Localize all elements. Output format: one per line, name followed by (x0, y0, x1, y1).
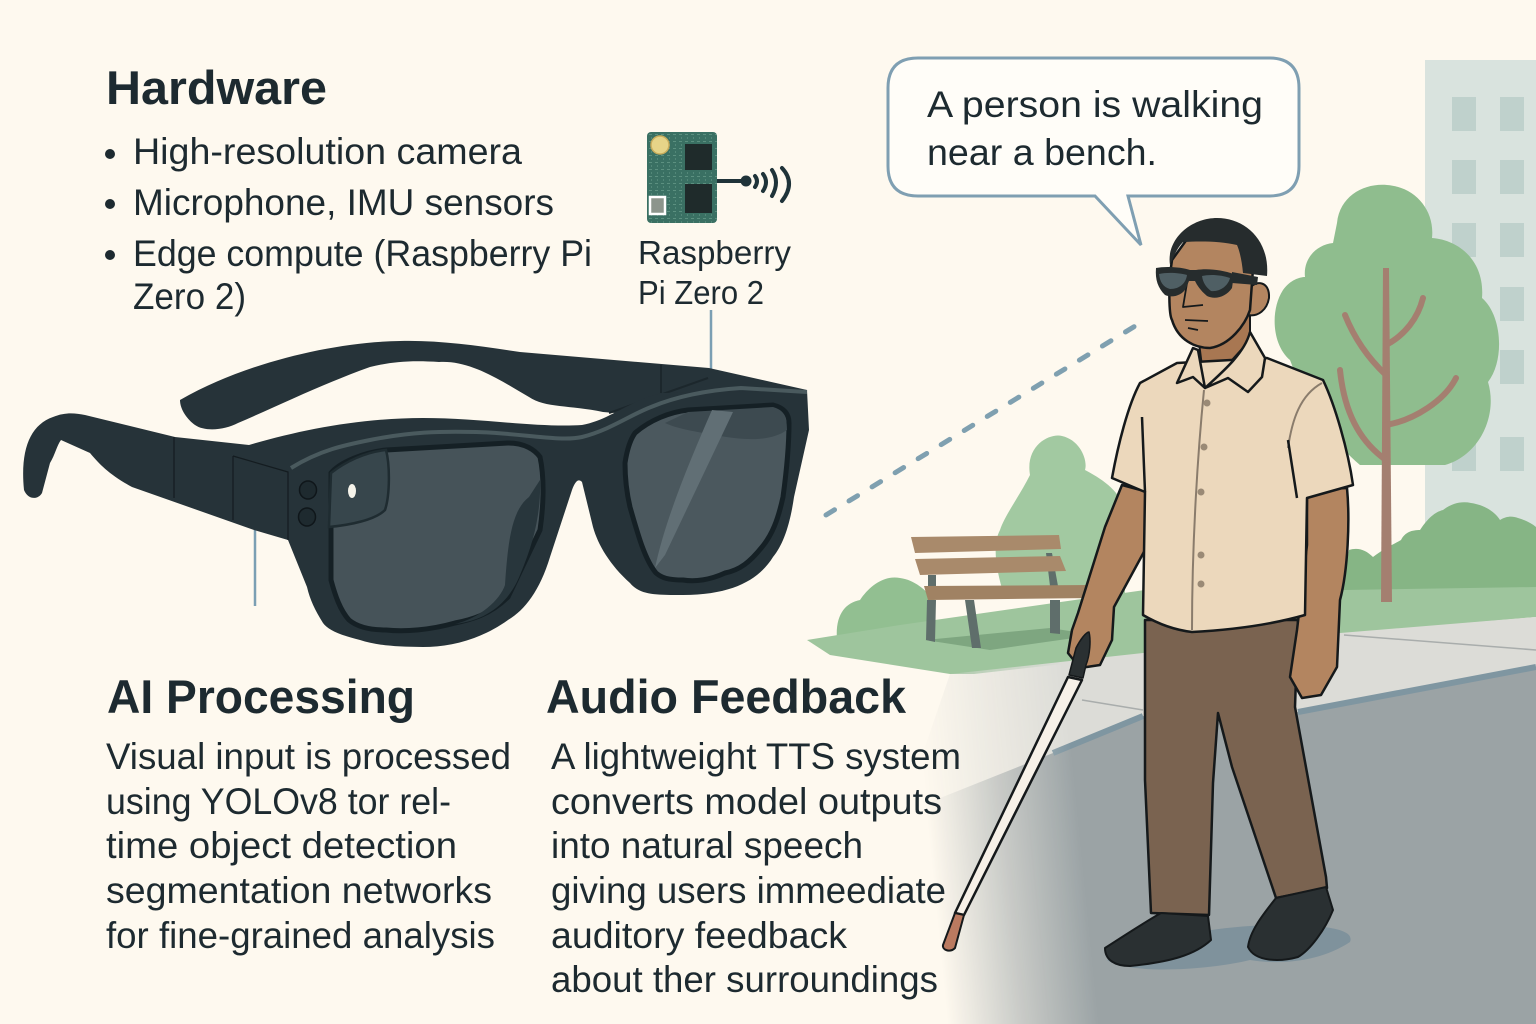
leader line to ai processing (254, 528, 256, 606)
dashed sightline from glasses (826, 320, 1145, 515)
body: audio feedback: converts model outputs (551, 781, 942, 822)
tree trunk and branches (1340, 268, 1456, 602)
heading: audio feedback: Audio Feedback (546, 670, 907, 723)
left arm and hand (1068, 485, 1148, 668)
shirt (1112, 358, 1353, 632)
bullet points: Zero 2) (133, 276, 246, 317)
body: ai processing (106, 736, 511, 956)
body: ai processing: segmentation networks (106, 870, 492, 911)
right lens reflection (655, 410, 733, 568)
hair (1170, 218, 1267, 276)
label: raspberry pi zero 2: Raspberry (638, 234, 791, 271)
smart glasses (23, 341, 809, 647)
camera dot (348, 484, 356, 498)
shoe shadow (1107, 925, 1351, 969)
far temple arm (180, 341, 807, 429)
temple panel seams (174, 437, 288, 540)
pavement and road (880, 617, 1536, 1024)
body: ai processing: for fine-grained analysis (106, 915, 495, 956)
icon: raspberry pi board with wireless signal (647, 132, 789, 223)
bullet points: Microphone, IMU sensors (133, 182, 554, 223)
heading: ai processing: AI Processing (107, 670, 415, 723)
body: audio feedback: A lightweight TTS system (551, 736, 961, 777)
bullet points: High-resolution camera (133, 131, 522, 172)
body: audio feedback: about ther surroundings (551, 959, 938, 1000)
building background (1425, 60, 1536, 540)
collar (1177, 332, 1265, 392)
bullet points: Edge compute (Raspberry Pi (133, 233, 592, 274)
right arm (1290, 488, 1348, 698)
illustration of a person with white cane (943, 218, 1353, 969)
left lens shadow (455, 480, 540, 624)
frame highlight ridge (291, 388, 807, 468)
label: raspberry pi zero 2: Pi Zero 2 (638, 274, 764, 311)
right lens upper shade (665, 407, 787, 439)
tree foliage (1275, 185, 1499, 465)
shirt buttons (1198, 400, 1210, 588)
label: raspberry pi zero 2 (638, 234, 791, 311)
cane (943, 632, 1090, 951)
shoes (1105, 887, 1333, 966)
heading: hardware: Hardware (106, 61, 327, 114)
right lens (625, 405, 789, 581)
neck (1198, 315, 1250, 390)
body: audio feedback: auditory feedback (551, 915, 847, 956)
face (1169, 235, 1254, 348)
left lens (331, 443, 543, 631)
front frame with near temple (23, 390, 809, 647)
body: ai processing: using YOLOv8 tor rel- (106, 781, 451, 822)
ear (1248, 283, 1269, 315)
leader line to hardware (710, 310, 712, 372)
speech bubble: near a bench. (927, 132, 1157, 173)
bullet points (105, 131, 592, 317)
bushes and lawn (807, 436, 1536, 674)
body: ai processing: Visual input is processed (106, 736, 511, 777)
hardware section (105, 61, 592, 317)
trousers (1145, 620, 1327, 915)
sunglasses (1156, 267, 1258, 298)
body: audio feedback: giving users immeediate (551, 870, 946, 911)
camera module (329, 450, 389, 527)
body: audio feedback: into natural speech (551, 825, 863, 866)
body: ai processing: time object detection (106, 825, 457, 866)
sensor holes (298, 481, 316, 526)
temple hinge details (609, 365, 708, 413)
speech bubble (888, 58, 1299, 245)
bench (911, 535, 1095, 650)
body: audio feedback (551, 736, 961, 1000)
audio feedback section (546, 670, 961, 1000)
ai processing section (106, 670, 511, 956)
speech bubble: A person is walking (927, 84, 1263, 125)
